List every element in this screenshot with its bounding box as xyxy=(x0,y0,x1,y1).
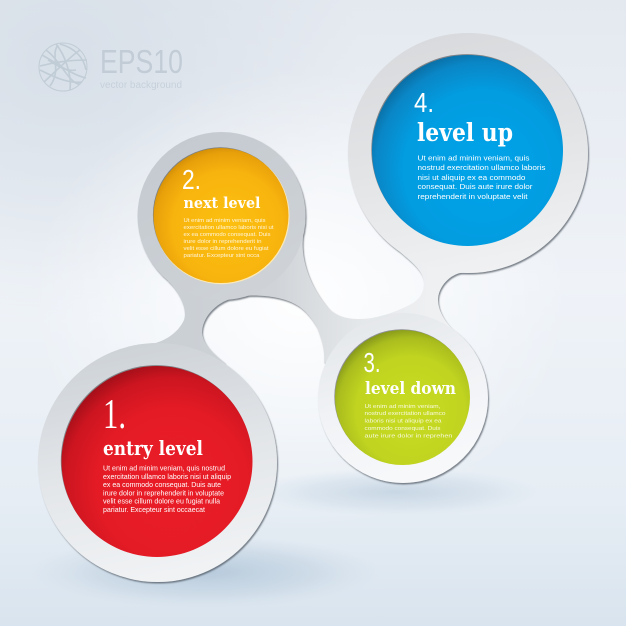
ring: yellow xyxy=(138,132,306,300)
number 2: 2. xyxy=(182,164,201,195)
body text xyxy=(364,404,452,440)
green disc xyxy=(335,330,470,465)
ring: red xyxy=(38,343,277,582)
panel: red entry level xyxy=(61,365,252,557)
blue disc xyxy=(372,55,563,246)
body text: irure dolor in reprehenderit in xyxy=(184,239,262,245)
panel: green level down xyxy=(334,329,470,465)
icon: wire globe xyxy=(39,43,87,91)
body text: Ut enim ad minim veniam, quis nostrud xyxy=(103,464,225,472)
logo heading: EPS10 xyxy=(100,43,183,80)
body text: ex ea commodo consequat. Duis aute xyxy=(103,480,221,489)
red disc edge xyxy=(61,365,252,556)
body text xyxy=(418,154,546,201)
body text: ex ea commodo consequat. Duis xyxy=(184,232,271,238)
body text: nostrud exercitation ullamco xyxy=(364,411,446,417)
body text: aute irure dolor in reprehen xyxy=(364,434,452,440)
connector links xyxy=(152,152,510,462)
body text xyxy=(103,464,231,514)
heading: next level xyxy=(184,194,261,212)
background top-left tint xyxy=(0,0,360,320)
body text: nisi ut aliquip ex ea commodo xyxy=(418,173,526,182)
connected ring body xyxy=(38,33,588,582)
body text: exercitation ullamco laboris nisi ut aliquip xyxy=(103,472,231,481)
yellow rim xyxy=(154,148,290,284)
background centre glow xyxy=(30,70,570,530)
body text: nostrud exercitation ullamco laboris xyxy=(418,163,546,172)
body text: commodo consequat. Duis xyxy=(364,426,441,432)
number 4: 4. xyxy=(414,87,434,118)
yellow disc edge xyxy=(153,147,288,282)
panel: yellow next level xyxy=(153,147,290,284)
green disc edge xyxy=(334,329,469,464)
body text: reprehenderit in voluptate velit xyxy=(418,192,528,201)
panel: blue level up xyxy=(371,54,563,246)
body text: velit esse cillum dolore eu fugiat nulla xyxy=(103,496,221,506)
ring: green xyxy=(318,313,488,483)
body text: pariatur. Excepteur sint occaecat xyxy=(103,505,206,514)
floor shadow under green circle xyxy=(250,468,540,516)
body text: Ut enim ad minim veniam, quis xyxy=(184,218,266,224)
body text xyxy=(184,218,274,259)
ring: blue xyxy=(348,33,588,273)
floor shadow under red circle xyxy=(30,536,380,608)
body text: irure dolor in reprehenderit in voluptate xyxy=(103,488,224,498)
red disc xyxy=(62,366,252,557)
body text: pariatur. Excepteur sint occa xyxy=(184,253,260,259)
body text: velit esse cillum dolore eu fugiat xyxy=(184,246,269,252)
heading: entry level xyxy=(103,436,203,460)
heading: level down xyxy=(365,379,456,399)
heading: level up xyxy=(417,118,513,147)
number 1: 1. xyxy=(103,392,126,438)
body text: exercitation ullamco laboris nisi ut xyxy=(184,225,274,231)
logo: EPS10 xyxy=(39,43,183,91)
blue disc edge xyxy=(371,54,562,245)
number 3: 3. xyxy=(364,347,380,378)
yellow disc xyxy=(154,148,288,283)
logo subtitle: vector background xyxy=(100,80,182,91)
body text: Ut enim ad minim veniam, quis xyxy=(418,154,530,162)
body text: consequat. Duis aute irure dolor xyxy=(418,182,533,191)
body text: Ut enim ad minim veniam, xyxy=(364,404,441,410)
body text: laboris nisi ut aliquip ex ea xyxy=(364,418,442,424)
